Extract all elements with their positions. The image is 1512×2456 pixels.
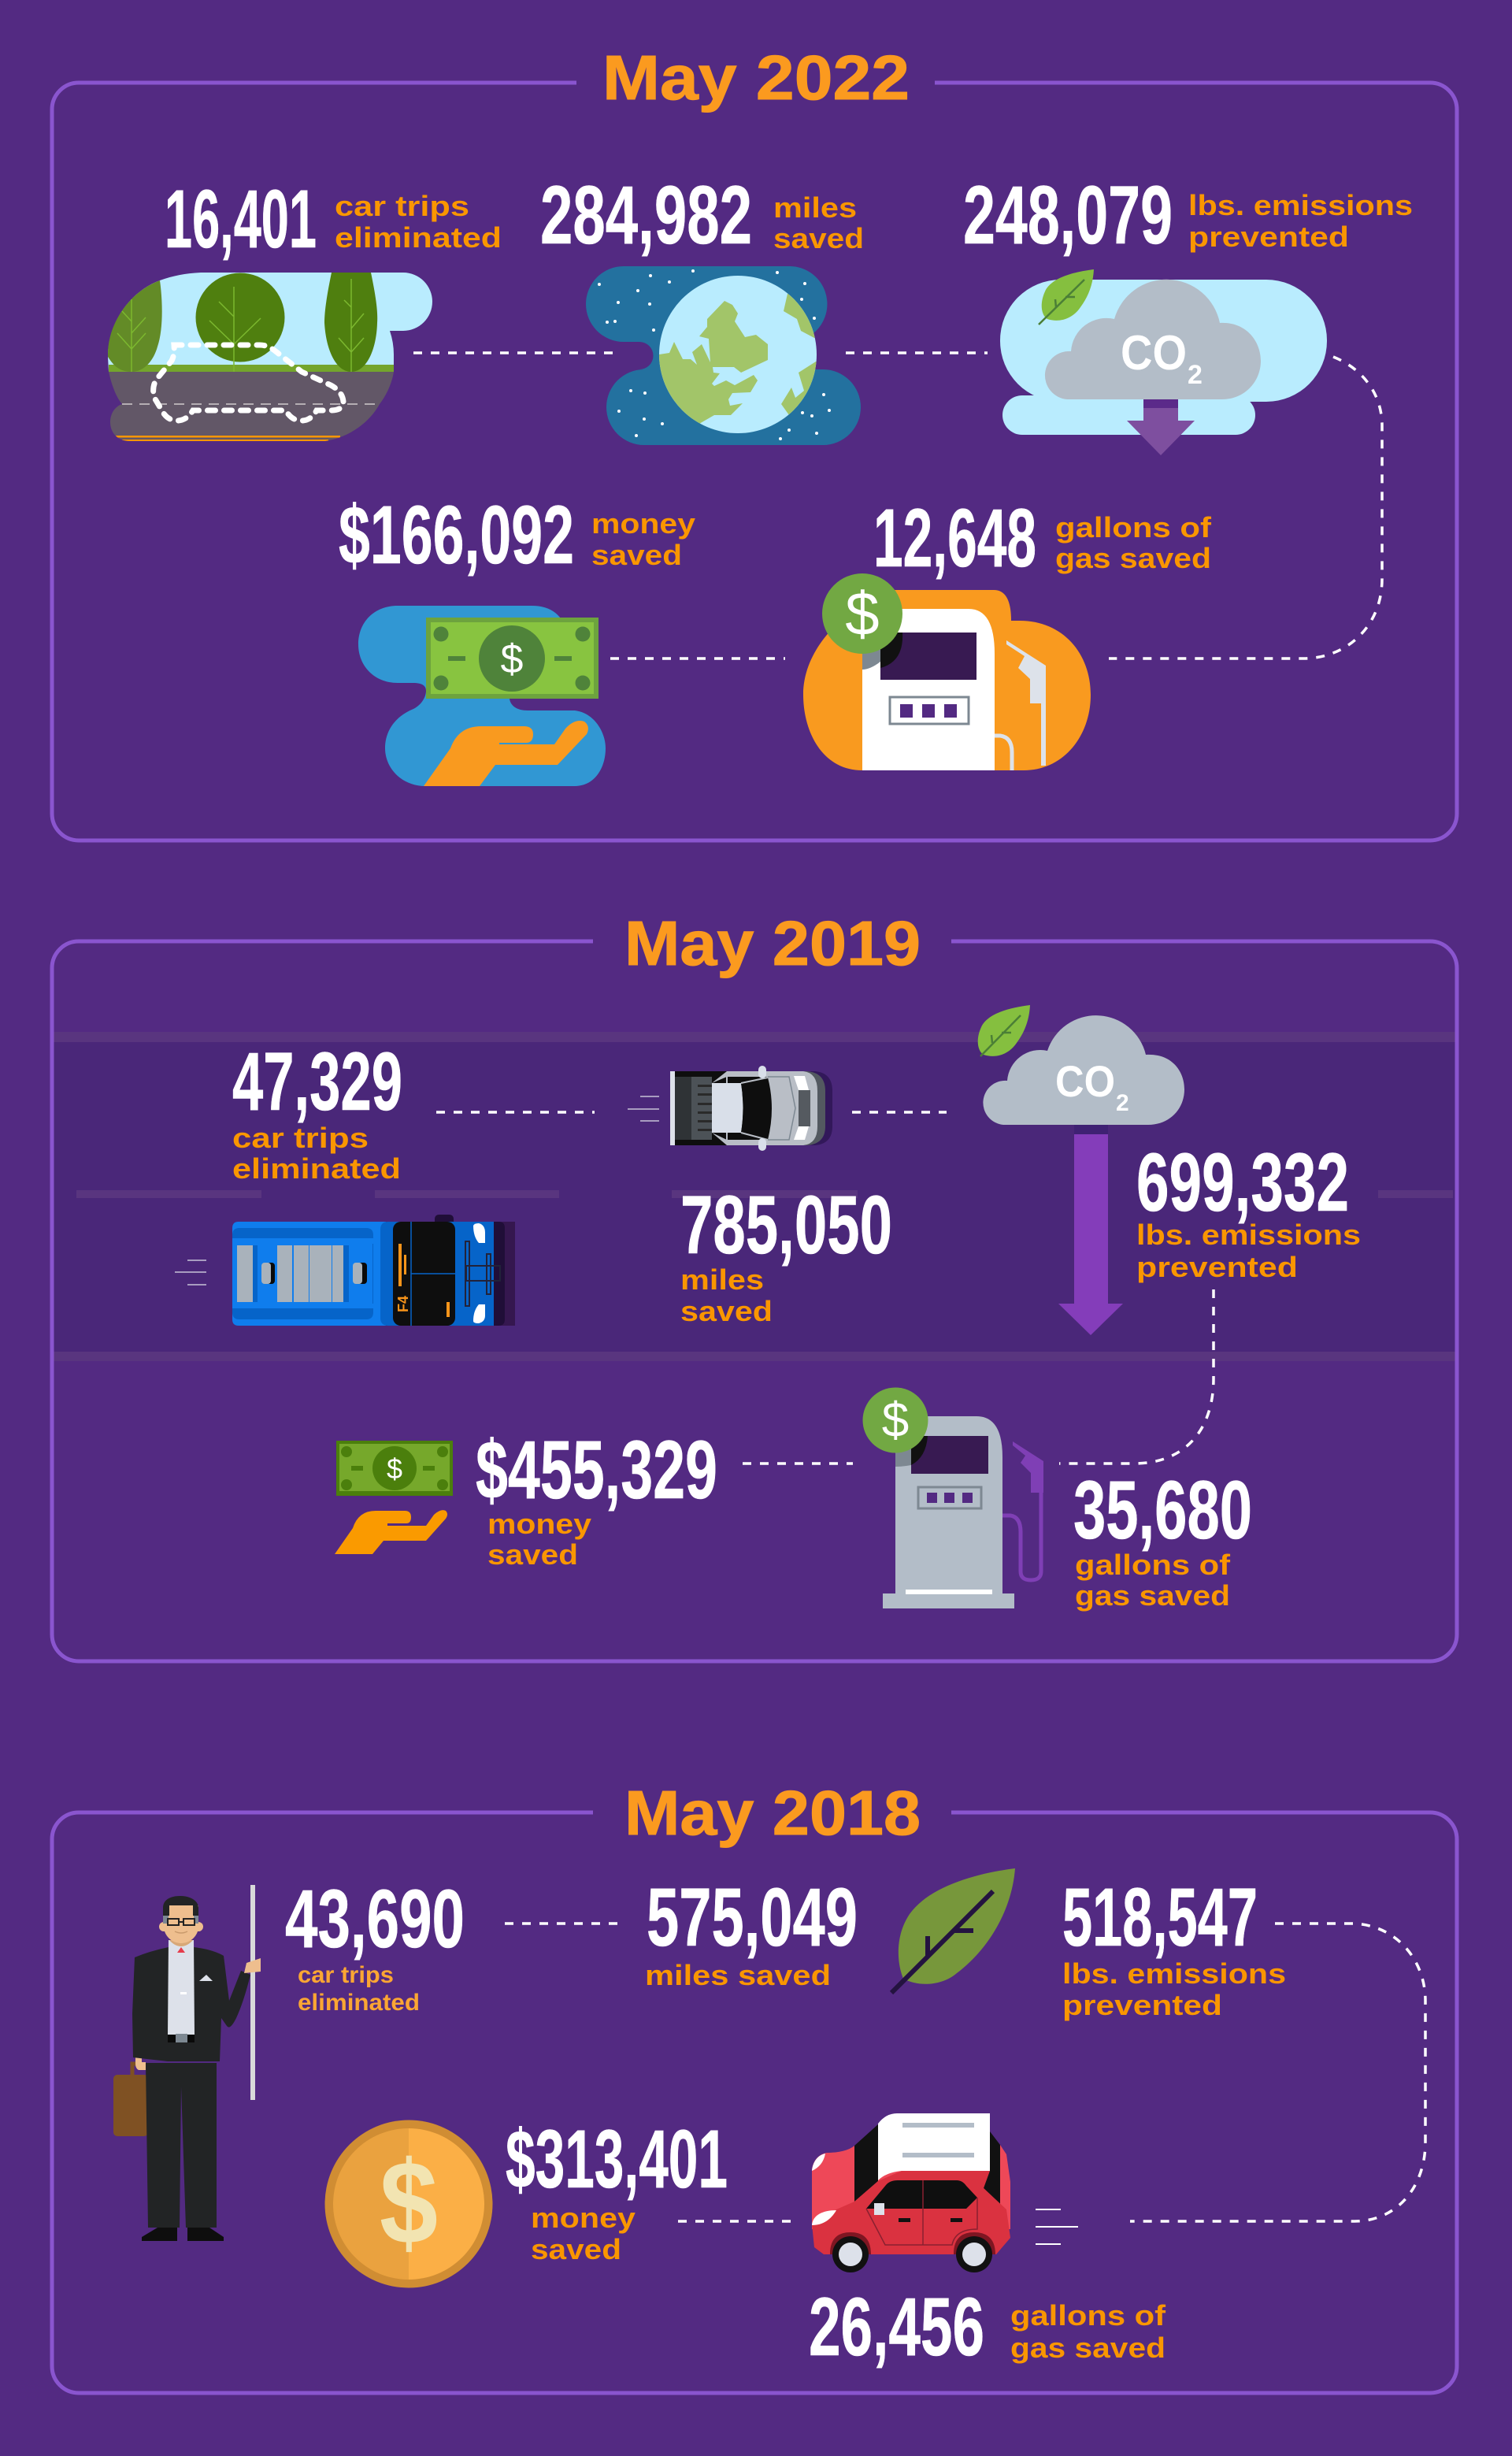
dashed connector: emissions to gas — [1109, 357, 1382, 659]
stat: gallons of gas saved: gallons of — [1055, 511, 1212, 544]
stat: car trips eliminated — [232, 1036, 402, 1185]
road background — [54, 1032, 1455, 1361]
stat: money saved: money — [531, 2202, 636, 2234]
stat: gallons of gas saved: gas saved — [1075, 1579, 1230, 1612]
stat: emissions prevented: lbs. emissions — [1188, 189, 1413, 221]
icon: coin — [324, 2120, 493, 2287]
stat: emissions prevented: lbs. emissions — [1062, 1957, 1286, 1990]
stat: gallons of gas saved: 26,456 — [809, 2281, 984, 2373]
connector — [743, 1462, 853, 1465]
panel border — [52, 1812, 1457, 2393]
stat: miles saved: saved — [680, 1295, 773, 1327]
stat: miles saved: miles — [680, 1263, 764, 1296]
stat: money saved: $313,401 — [506, 2113, 728, 2206]
stat: miles saved: 785,050 — [680, 1179, 892, 1271]
connector — [436, 1111, 595, 1114]
icon: leaf — [891, 1868, 1015, 1993]
stat: miles saved: 284,982 — [540, 169, 752, 262]
stat: money saved: saved — [487, 1538, 578, 1571]
stat: car trips eliminated: eliminated — [335, 221, 502, 254]
dashed connector: emissions to gas — [1130, 1924, 1425, 2221]
stat: gallons of gas saved: 12,648 — [873, 492, 1036, 584]
connector — [413, 351, 621, 354]
stat: emissions prevented: 248,079 — [963, 169, 1173, 262]
dashed connector: emissions to gas — [1059, 1289, 1214, 1464]
panel: May 2018 — [52, 1778, 1457, 2393]
stat: car trips eliminated: 47,329 — [232, 1036, 402, 1128]
stat: car trips eliminated: 16,401 — [165, 173, 317, 265]
stat: emissions prevented: prevented — [1062, 1989, 1222, 2021]
icon: CO2 cloud and leaf: CO — [1055, 1056, 1115, 1106]
icon: earth in space — [586, 266, 861, 445]
icon: gas pump: $ — [845, 579, 880, 648]
icon: coin: $ — [380, 2136, 438, 2269]
stat: gallons of gas saved — [1073, 1464, 1252, 1612]
icon: CO2 cloud and leaf: 2 — [1116, 1090, 1129, 1116]
stat: emissions prevented — [1062, 1872, 1286, 2021]
stat: miles saved: miles — [773, 191, 857, 224]
stat: emissions prevented — [1136, 1137, 1361, 1283]
connector — [852, 1111, 947, 1114]
stat: money saved: $455,329 — [476, 1424, 717, 1516]
stat: emissions prevented: prevented — [1136, 1251, 1298, 1283]
stat: car trips eliminated: eliminated — [298, 1990, 420, 2016]
panel: May 2022 — [52, 43, 1457, 840]
icon: car seen from above — [628, 1066, 832, 1151]
stat: car trips eliminated: car trips — [232, 1122, 369, 1154]
stat: gallons of gas saved: gallons of — [1075, 1549, 1231, 1581]
panel: May 2019 — [52, 908, 1457, 1661]
stat: money saved — [476, 1424, 717, 1571]
heading: May 2022: May 2022 — [602, 43, 910, 113]
stat: miles saved: miles saved — [645, 1959, 831, 1991]
stat: money saved: saved — [591, 539, 682, 571]
heading: May 2018: May 2018 — [624, 1778, 921, 1848]
stat: gallons of gas saved: gas saved — [1010, 2332, 1166, 2364]
stat: car trips eliminated: car trips — [298, 1962, 394, 1988]
stat: money saved: $166,092 — [339, 489, 574, 581]
stat: gallons of gas saved: gas saved — [1055, 542, 1211, 574]
stat: emissions prevented: 518,547 — [1062, 1872, 1258, 1964]
stat: miles saved: 575,049 — [647, 1872, 858, 1964]
icon: CO2 cloud and leaf — [978, 1005, 1184, 1125]
illustration: commuter holding pole — [113, 1885, 261, 2241]
icon: road with trees and car outline — [102, 273, 432, 443]
icon: red car — [812, 2113, 1078, 2272]
icon: cash and hand: $ — [501, 636, 524, 682]
stat: money saved: money — [591, 507, 695, 540]
connector — [505, 1922, 618, 1925]
stat: car trips eliminated: 43,690 — [285, 1873, 465, 1965]
stat: money saved: money — [487, 1508, 591, 1540]
icon: cash and hand: $ — [387, 1452, 402, 1485]
stat: emissions prevented: 699,332 — [1136, 1137, 1349, 1229]
stat: car trips eliminated — [285, 1873, 465, 2016]
heading: May 2019: May 2019 — [624, 908, 921, 978]
panel border — [52, 83, 1457, 840]
stat: gallons of gas saved: gallons of — [1010, 2299, 1166, 2332]
icon: cash and hand — [358, 606, 606, 786]
icon: CO2 cloud with leaf and arrow: CO — [1121, 326, 1187, 380]
connector — [846, 351, 988, 354]
stat: gallons of gas saved: 35,680 — [1073, 1464, 1252, 1556]
stat: miles saved — [645, 1872, 858, 1991]
connector — [678, 2220, 792, 2223]
stat: emissions prevented: lbs. emissions — [1136, 1219, 1361, 1251]
icon: cash and hand — [335, 1441, 453, 1554]
stat: miles saved: saved — [773, 222, 864, 254]
arrow: down — [1058, 1125, 1123, 1335]
icon: bus seen from above: F4 — [395, 1296, 411, 1312]
stat: miles saved — [680, 1179, 892, 1327]
stat: car trips eliminated: car trips — [335, 190, 469, 222]
icon: gas pump — [863, 1388, 1043, 1608]
icon: bus seen from above — [175, 1215, 515, 1326]
icon: CO2 cloud with leaf and arrow — [1000, 269, 1327, 455]
stat: emissions prevented — [963, 169, 1413, 262]
icon: CO2 cloud with leaf and arrow: 2 — [1188, 360, 1203, 390]
stat: emissions prevented: prevented — [1188, 221, 1349, 253]
panel border — [52, 941, 1457, 1661]
icon: gas pump — [803, 573, 1091, 770]
stat: money saved — [506, 2113, 728, 2265]
stat: car trips eliminated: eliminated — [232, 1152, 401, 1185]
connector — [610, 657, 785, 660]
icon: gas pump: $ — [882, 1393, 909, 1448]
stat: money saved: saved — [531, 2233, 621, 2265]
